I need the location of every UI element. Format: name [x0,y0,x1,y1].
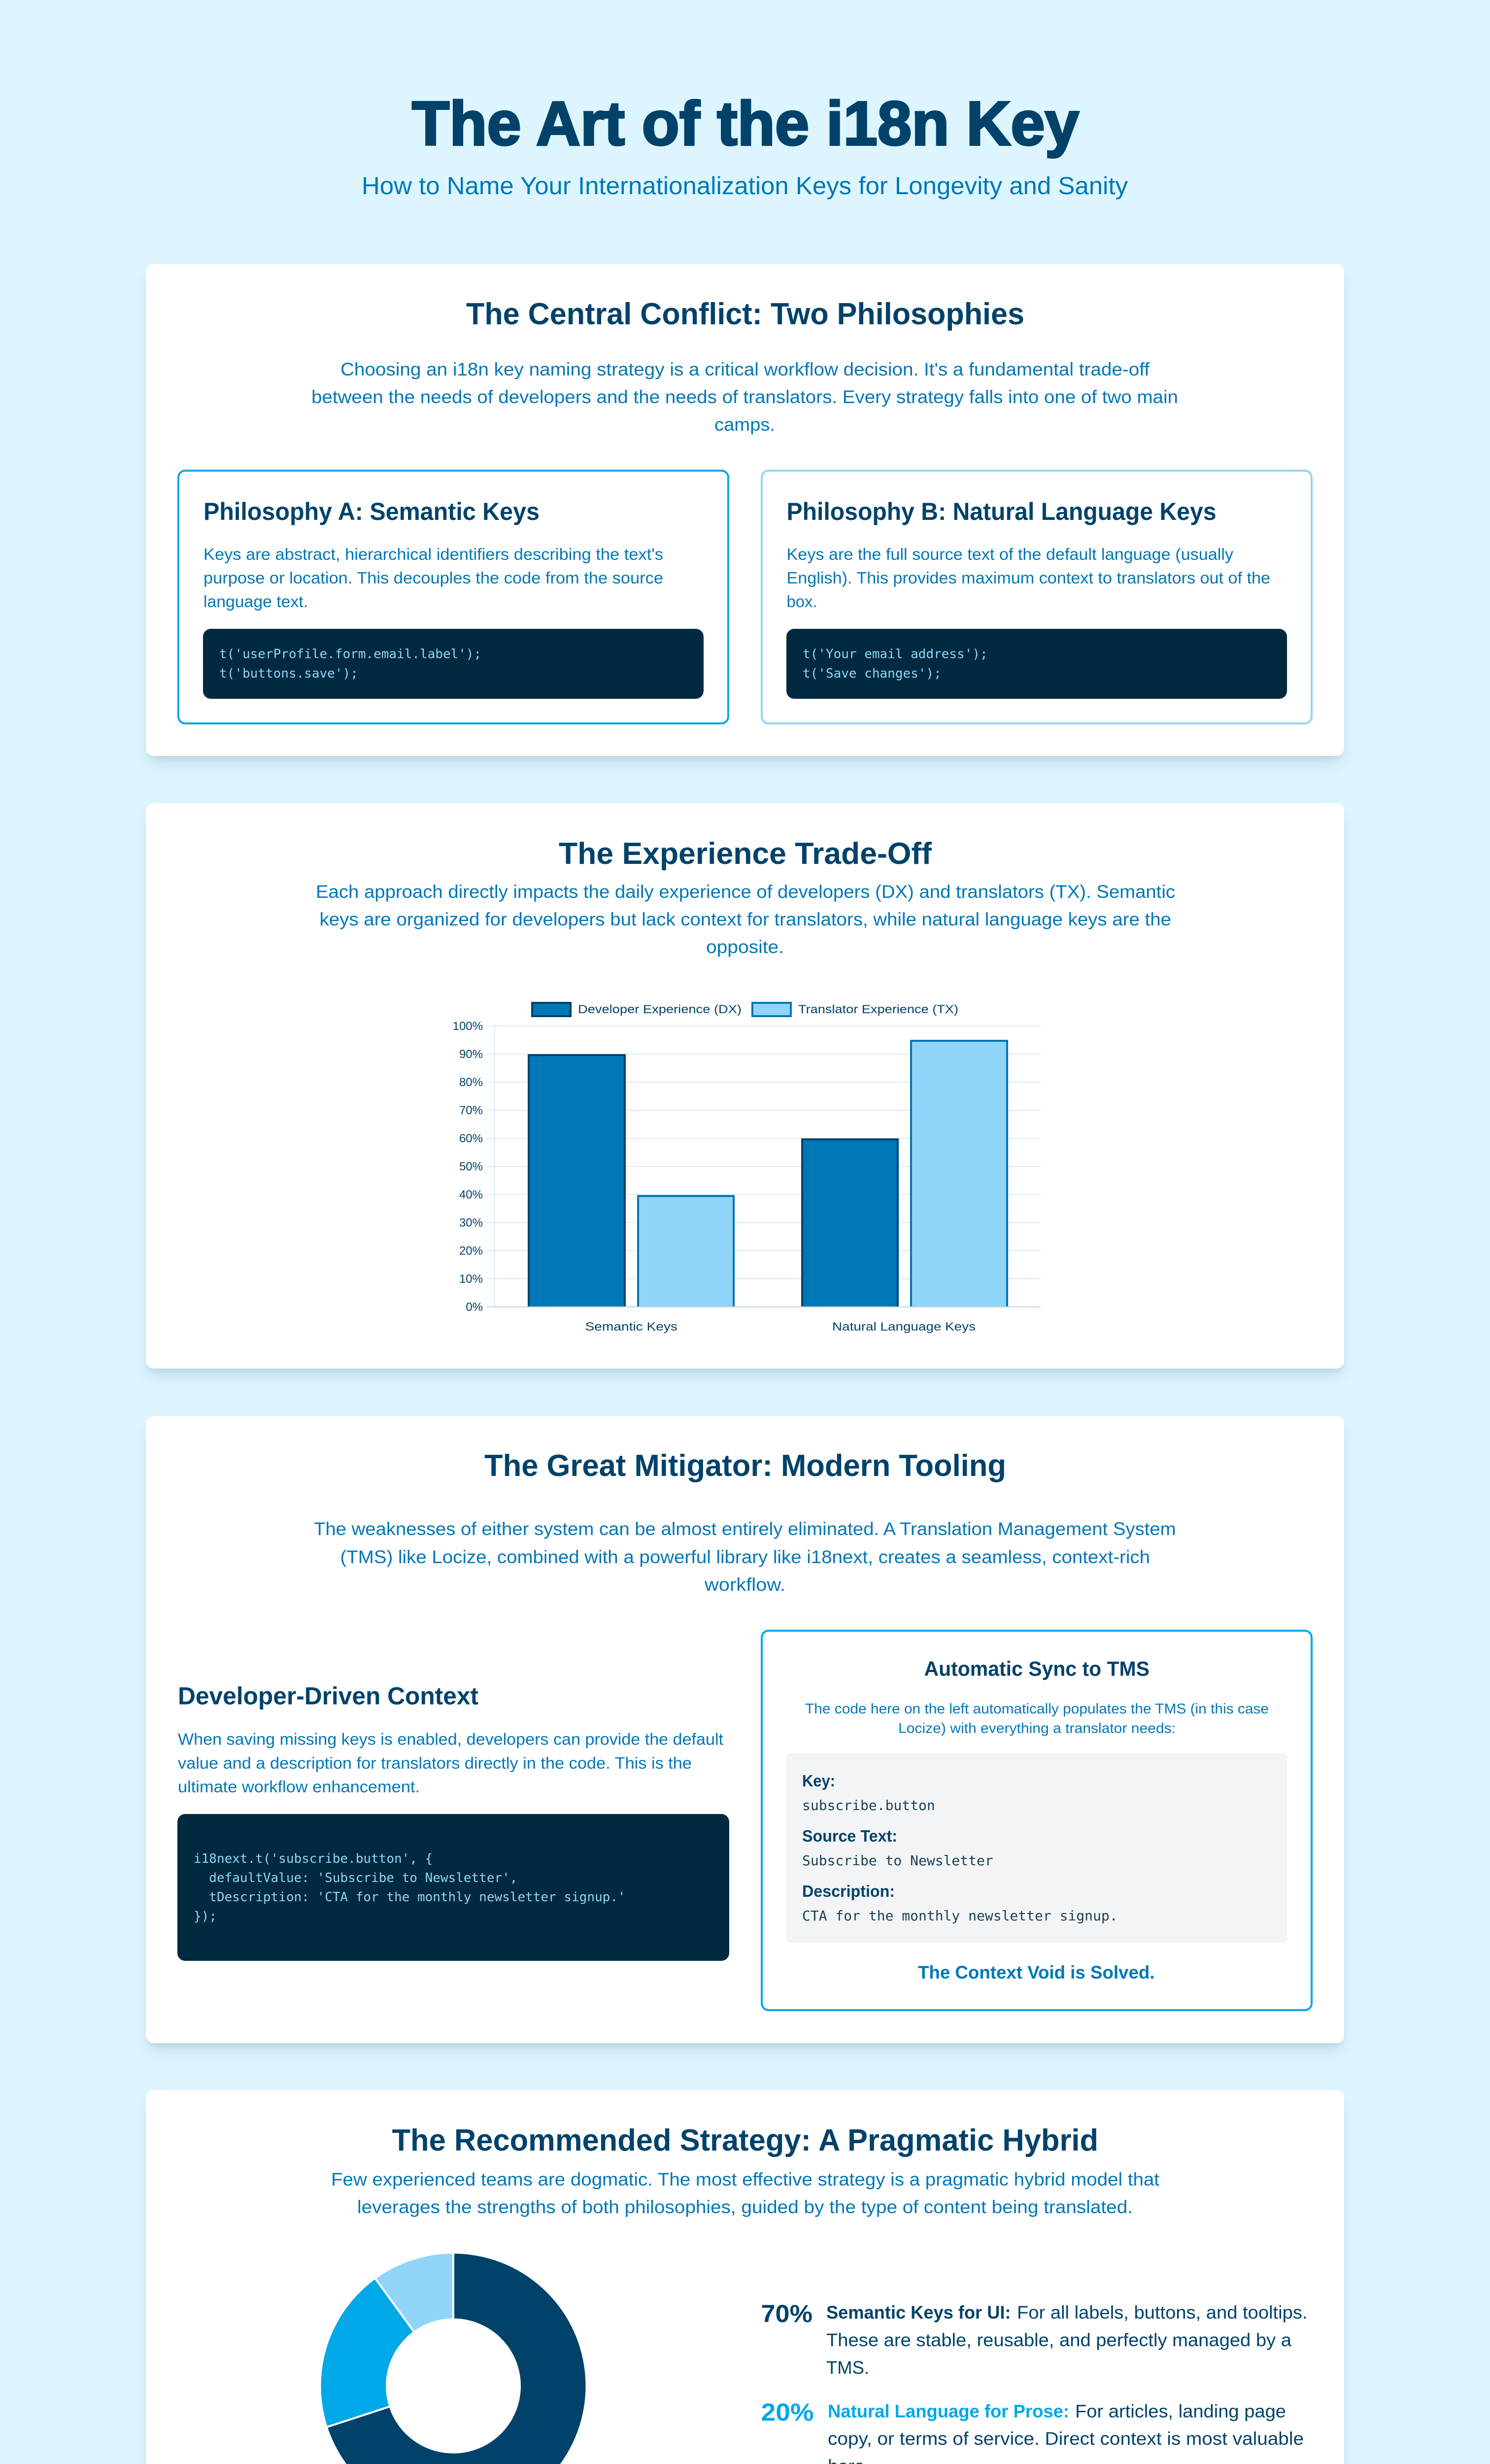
list item: 70 percent: These are stable, reusable, and perfectly managed by a [826,2329,1291,2350]
text: developer-driven description [178,1731,723,1796]
field: source text [802,1827,993,1869]
panel: TMS fields [786,1753,1287,1943]
y axis labels: 40% [459,1188,483,1201]
y axis labels: 70% [459,1104,483,1117]
text: mitigator intro: workflow. [704,1574,785,1595]
panel: the experience trade-off [146,803,1344,1369]
y axis labels [453,1020,483,1314]
y axis labels: 80% [459,1076,483,1089]
text: developer-driven description: value and a description for translators directly in the code. This is the [178,1754,692,1773]
list item: 20 percent: Natural Language for Prose: [828,2401,1069,2422]
list item: 70 percent: 70% [761,2300,813,2327]
y axis labels: 90% [459,1048,483,1061]
field: source text: Source Text: [802,1827,897,1846]
field: description [802,1882,1118,1924]
text: mitigator intro: The weaknesses of either system can be almost entirely eliminated. A Translation Management System [314,1518,1176,1539]
chart legend: Translator Experience (TX) [798,1003,958,1016]
text: mitigator intro [314,1518,1176,1595]
heading: great mitigator: The Great Mitigator: Modern Tooling [484,1448,1006,1483]
donut chart [321,2254,585,2464]
field: key: Key: [802,1772,835,1790]
y axis labels: 10% [459,1272,483,1286]
bars: semantic keys [528,1054,735,1306]
list item: 20 percent: For articles, landing page [1075,2401,1286,2422]
panel: automatic sync to TMS [762,1631,1312,2010]
list item: 70 percent [761,2300,1308,2378]
heading: central conflict: The Central Conflict: Two Philosophies [466,297,1024,331]
y axis labels: 60% [459,1132,483,1145]
code block: i18next call: tDescription: 'CTA for the monthly newsletter signup.' [194,1890,626,1905]
text: philosophy B description: English). This provides maximum context to translators out of the [786,569,1270,587]
y axis labels: 30% [459,1216,483,1230]
y axis labels: 100% [453,1020,483,1033]
y axis labels: 20% [459,1244,483,1258]
text: philosophy B description: Keys are the full source text of the default language (usually [786,546,1233,564]
panel: the central conflict [146,264,1344,756]
x axis labels: Natural Language Keys [832,1320,976,1334]
subtitle: How to Name Your Internationalization Keys for Longevity and Sanity [362,172,1128,200]
text: sync description [805,1701,1269,1737]
text: conflict intro [311,359,1178,435]
field: source text: Subscribe to Newsletter [802,1852,993,1869]
text: mitigator intro: (TMS) like Locize, combined with a powerful library like i18next, creates a seamless, context-rich [340,1546,1150,1567]
text: philosophy A description: language text. [203,593,308,611]
text: philosophy B description: box. [786,593,817,611]
bar chart [453,1003,1041,1334]
heading: philosophy B: Philosophy B: Natural Language Keys [786,498,1216,525]
text: conflict intro: between the needs of developers and the needs of translators. Every strategy falls into one of two main [311,386,1178,407]
list item: 20 percent [761,2398,1304,2464]
header [362,94,1128,200]
y axis labels: 50% [459,1160,483,1173]
text: philosophy A description: purpose or location. This decouples the code from the source [203,569,663,587]
text: strategy intro: Few experienced teams are dogmatic. The most effective strategy is a pragmatic hybrid model that [331,2169,1160,2190]
list item: 20 percent: copy, or terms of service. Direct context is most valuable [828,2428,1304,2449]
code block: philosophy B: t('Your email address'); [803,647,988,661]
code block: philosophy A [203,629,704,699]
list item: 70 percent: Semantic Keys for UI: [826,2302,1011,2323]
text: strategy intro [331,2169,1160,2217]
text: trade-off intro: Each approach directly impacts the daily experience of developers (DX) and translators (TX). Semantic [316,881,1175,902]
text: philosophy A description: Keys are abstract, hierarchical identifiers describing the text's [203,546,663,564]
heading: developer-driven context: Developer-Driven Context [178,1682,478,1710]
text: philosophy B description [786,546,1270,611]
code block: philosophy B [786,629,1287,699]
code block: i18next call: i18next.t('subscribe.button', { [194,1851,433,1866]
text: sync description: Locize) with everything a translator needs: [898,1721,1176,1737]
chart legend [532,1003,958,1016]
heading: automatic sync: Automatic Sync to TMS [924,1657,1150,1680]
x axis labels [585,1320,976,1334]
text: trade-off intro: opposite. [706,936,784,957]
heading: philosophy A: Philosophy A: Semantic Keys [203,498,540,525]
field: description: Description: [802,1882,895,1901]
chart legend: Developer Experience (DX) [578,1003,742,1016]
text: sync description: The code here on the left automatically populates the TMS (in this case [805,1701,1269,1717]
text: trade-off intro [316,881,1175,957]
panel: philosophy A [178,471,728,723]
text: developer-driven description: ultimate workflow enhancement. [178,1778,420,1796]
code block: i18next call: }); [194,1909,217,1924]
heading: experience trade-off: The Experience Trade-Off [559,836,932,871]
text: conflict intro: Choosing an i18n key naming strategy is a critical workflow decision. It's a fundamental trade-off [340,359,1150,379]
list item: 70 percent: TMS. [826,2357,869,2378]
bars: natural language keys [801,1040,1008,1306]
list item: 70 percent: For all labels, buttons, and tooltips. [1017,2302,1308,2323]
panel: philosophy B [762,471,1312,723]
code block: philosophy A: t('buttons.save'); [219,666,358,681]
code block: i18next call [177,1814,729,1961]
field: description: CTA for the monthly newsletter signup. [802,1908,1118,1924]
text: conflict intro: camps. [714,414,775,435]
list item: 20 percent: 20% [761,2398,814,2426]
field: key: subscribe.button [802,1797,935,1814]
y axis labels: 0% [466,1300,483,1314]
code block: philosophy A: t('userProfile.form.email.label'); [219,647,481,661]
text: strategy intro: leverages the strengths of both philosophies, guided by the type of content being translated. [357,2196,1133,2217]
panel: the great mitigator [146,1416,1344,2043]
code block: philosophy B: t('Save changes'); [803,666,942,681]
text: philosophy A description [203,546,663,611]
heading: recommended strategy: The Recommended Strategy: A Pragmatic Hybrid [392,2123,1098,2157]
text: developer-driven description: When saving missing keys is enabled, developers can provide the default [178,1731,723,1748]
text: trade-off intro: keys are organized for developers but lack context for translators, while natural language keys are the [319,909,1171,929]
callout: context void solved: The Context Void is Solved. [918,1962,1155,1983]
x axis labels: Semantic Keys [585,1320,677,1334]
field: key [802,1772,935,1814]
code block: i18next call: defaultValue: 'Subscribe to Newsletter', [194,1871,517,1885]
panel: the recommended strategy [146,2090,1344,2464]
